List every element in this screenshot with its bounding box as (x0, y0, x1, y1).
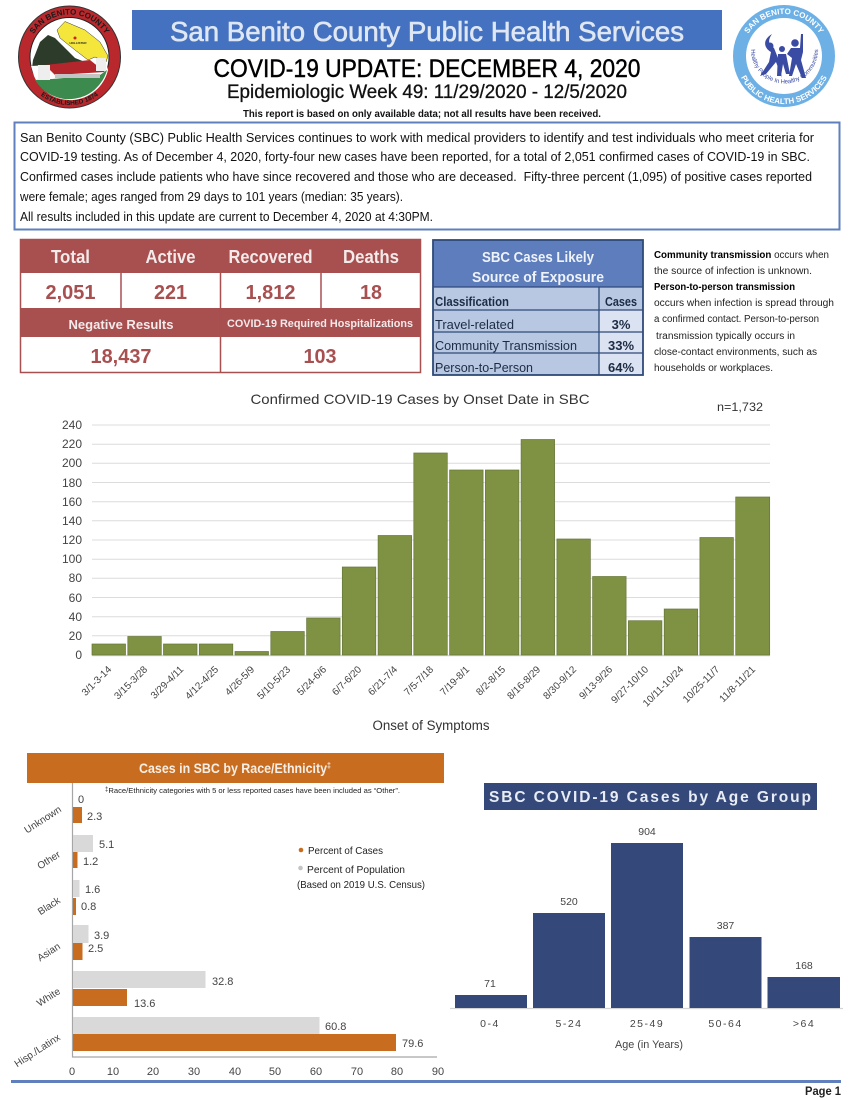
bar chart: race/ethnicity: Unknown (23, 804, 64, 836)
title banner (132, 10, 722, 50)
bar chart: cases by onset date: 3/15-3/28 (112, 664, 150, 702)
bar chart: race/ethnicity: 0 (78, 794, 84, 806)
bar chart: race/ethnicity: 50 (269, 1066, 281, 1078)
bar chart: cases by onset date: 40 (69, 610, 82, 624)
logo: San Benito County seal: ESTABLISHED 1874 (41, 92, 98, 105)
panel: summary text: San Benito County (SBC) Public Health Services continues to work with medical providers to identify and test individuals who meet criteria for (20, 131, 814, 145)
bar chart: cases by onset date: 6/7-6/20 (330, 664, 364, 698)
age group heading (484, 783, 817, 810)
page number: Page 1 (805, 1084, 841, 1098)
bar chart: cases by onset date: 3/1-3-14 (80, 664, 114, 698)
bar chart: race/ethnicity: 32.8 (212, 976, 233, 988)
legend: race/ethnicity: (Based on 2019 U.S. Census) (297, 879, 425, 891)
bar chart: race/ethnicity: 0 (69, 1066, 75, 1078)
legend: race/ethnicity: Percent of Cases (308, 845, 383, 857)
bar chart: cases by onset date (62, 418, 770, 733)
bar chart: race/ethnicity: Asian (36, 941, 63, 964)
race/ethnicity heading: ‡ (327, 761, 331, 770)
chart title: cases by onset date: Confirmed COVID-19 Cases by Onset Date in SBC (250, 391, 590, 407)
panel: case totals table: Active (146, 247, 196, 267)
panel: summary text: were female; ages ranged from 29 days to 101 years (median: 35 years). (19, 190, 403, 204)
bar chart: race/ethnicity: 13.6 (134, 998, 155, 1010)
bar chart: cases by onset date: 8/30-9/12 (541, 664, 579, 702)
panel: source of exposure table: Community Transmission (435, 338, 577, 353)
bar chart: race/ethnicity: 80 (391, 1066, 403, 1078)
logo: Public Health Services (733, 5, 835, 107)
bar chart: cases by onset date: 100 (62, 552, 82, 566)
bar chart: age group: 0-4 (480, 1018, 500, 1030)
panel: source of exposure table: 3% (612, 317, 631, 332)
panel: case totals table: Deaths (343, 247, 399, 267)
footer rule (11, 1080, 841, 1083)
panel: case totals table: 1,812 (246, 282, 296, 304)
logo: Public Health Services: SAN BENITO COUNTY (744, 8, 824, 33)
bar chart: race/ethnicity: 10 (107, 1066, 119, 1078)
bar chart: cases by onset date: 5/10-5/23 (255, 664, 293, 702)
bar chart: race/ethnicity: 20 (147, 1066, 159, 1078)
bar chart: race/ethnicity: 60.8 (325, 1021, 346, 1033)
bar chart: race/ethnicity: 79.6 (402, 1038, 423, 1050)
panel: source of exposure table: 33% (608, 338, 634, 353)
title banner: San Benito County Public Health Services (170, 16, 684, 47)
bar chart: age group: 25-49 (630, 1018, 664, 1030)
logo: San Benito County seal (18, 6, 121, 108)
bar chart: race/ethnicity: Black (36, 895, 63, 918)
panel: source of exposure table: Classification (435, 294, 509, 309)
panel: summary text: Confirmed cases include patients who have since recovered and those who are deceased. Fifty-three percent (1,095) of positive cases reported (20, 170, 812, 184)
bar chart: cases by onset date: 240 (62, 418, 82, 432)
bar chart: race/ethnicity: White (35, 986, 63, 1009)
bar chart: race/ethnicity: Hisp./Latinx (13, 1032, 63, 1070)
text block: transmission definitions: the source of infection is unknown. (654, 266, 812, 277)
bar chart: cases by onset date: 9/13-9/26 (577, 664, 615, 702)
bar chart: race/ethnicity: Other (36, 849, 63, 872)
bar chart: cases by onset date: 20 (69, 629, 82, 643)
bar chart: cases by onset date: 180 (62, 476, 82, 490)
panel: source of exposure table: Cases (605, 294, 637, 309)
bar chart: race/ethnicity: 2.5 (88, 943, 103, 955)
bar chart: age group: 50-64 (708, 1018, 743, 1030)
bar chart: cases by onset date: 8/16-8/29 (505, 664, 543, 702)
bar chart: cases by onset date: 200 (62, 456, 82, 470)
bar chart: cases by onset date: 10/25-11/7 (681, 664, 722, 705)
panel: case totals table: Total (51, 247, 90, 267)
text block: transmission definitions (654, 250, 834, 374)
panel: case totals table (20, 239, 421, 373)
panel: case totals table: COVID-19 Required Hospitalizations (227, 318, 413, 330)
panel: case totals table: Negative Results (68, 317, 174, 332)
panel: source of exposure table (433, 240, 643, 375)
panel: case totals table: 2,051 (46, 282, 96, 304)
panel: case totals table: 18 (360, 282, 382, 304)
logo: Public Health Services: PUBLIC HEALTH SERVICES (741, 75, 826, 104)
panel: case totals table: 221 (154, 282, 187, 304)
bar chart: cases by onset date: 3/29-4/11 (149, 664, 186, 701)
race/ethnicity footnote: Race/Ethnicity categories with 5 or less reported cases have been included as “Other”. (108, 786, 400, 795)
text block: transmission definitions: occurs when infection is spread through (654, 298, 834, 309)
bar chart: age group: Age (in Years) (615, 1039, 683, 1051)
bar chart: race/ethnicity: 90 (432, 1066, 444, 1078)
bar chart: race/ethnicity: 40 (229, 1066, 241, 1078)
text block: transmission definitions: Person-to-person transmission (654, 282, 795, 293)
bar chart: cases by onset date: 7/19-8/1 (438, 664, 472, 698)
bar chart: race/ethnicity (13, 783, 444, 1078)
bar chart: cases by onset date: 5/24-6/6 (295, 664, 329, 698)
bar chart: age group: 387 (717, 920, 734, 932)
bar chart: race/ethnicity: 1.2 (83, 856, 98, 868)
bar chart: cases by onset date: 9/27-10/10 (610, 664, 651, 706)
heading: epidemiologic week: Epidemiologic Week 49: 11/29/2020 - 12/5/2020 (227, 82, 627, 103)
logo: San Benito County seal: SAN BENITO COUNTY (30, 8, 110, 34)
legend: race/ethnicity: Percent of Population (307, 864, 405, 876)
panel: source of exposure table: 64% (608, 360, 634, 375)
panel: case totals table: Recovered (228, 247, 312, 267)
bar chart: age group: 71 (484, 978, 496, 990)
bar chart: cases by onset date: 11/8-11/21 (718, 664, 758, 705)
text block: transmission definitions: close-contact environments, such as (654, 347, 817, 358)
text block: transmission definitions: transmission typically occurs in (656, 331, 795, 342)
bar chart: cases by onset date: 6/21-7/4 (366, 664, 400, 698)
bar chart: race/ethnicity: 3.9 (94, 930, 109, 942)
panel: summary text: All results included in this update are current to December 4, 2020 at 4:30PM. (20, 210, 433, 224)
bar chart: age group: 904 (638, 826, 656, 838)
bar chart: cases by onset date: 220 (62, 437, 82, 451)
bar chart: cases by onset date: 120 (62, 533, 82, 547)
heading: update date: COVID-19 UPDATE: DECEMBER 4, 2020 (214, 55, 640, 83)
text block: transmission definitions: Community transmission occurs when (654, 250, 829, 261)
panel: summary text (14, 122, 840, 230)
panel: source of exposure table: Travel-related (435, 317, 514, 332)
bar chart: cases by onset date: 60 (69, 591, 82, 605)
bar chart: age group: 5-24 (555, 1018, 583, 1030)
text block: transmission definitions: a confirmed contact. Person-to-person (654, 314, 819, 325)
bar chart: race/ethnicity: 0.8 (81, 901, 96, 913)
bar chart: cases by onset date: 0 (75, 648, 82, 662)
bar chart: age group: 168 (795, 960, 813, 972)
bar chart: race/ethnicity: 60 (310, 1066, 322, 1078)
legend: race/ethnicity (297, 845, 425, 891)
panel: source of exposure table: SBC Cases Likely (482, 250, 594, 266)
bar chart: cases by onset date: 4/26-5/9 (223, 664, 257, 698)
bar chart: cases by onset date: 7/5-7/18 (402, 664, 436, 698)
panel: source of exposure table: Person-to-Person (435, 360, 533, 375)
text block: transmission definitions: households or workplaces. (654, 363, 773, 374)
bar chart: race/ethnicity: 30 (188, 1066, 200, 1078)
panel: case totals table: 18,437 (90, 346, 152, 368)
sample size note: n=1,732 (717, 400, 763, 414)
bar chart: race/ethnicity: 70 (351, 1066, 363, 1078)
bar chart: race/ethnicity: 1.6 (85, 884, 100, 896)
bar chart: age group (450, 826, 843, 1051)
panel: summary text: COVID-19 testing. As of December 4, 2020, forty-four new cases have been reported, for a total of 2,051 confirmed cases of COVID-19 in SBC. (20, 150, 810, 164)
race/ethnicity footnote: ‡ (105, 787, 108, 793)
bar chart: cases by onset date: 80 (69, 571, 82, 585)
logo: San Benito County seal: HOLLISTER (70, 41, 87, 45)
bar chart: age group: 520 (560, 896, 578, 908)
panel: source of exposure table: Source of Exposure (472, 270, 604, 286)
bar chart: cases by onset date: 8/2-8/15 (474, 664, 508, 698)
race/ethnicity heading: Cases in SBC by Race/Ethnicity (139, 760, 351, 776)
report note: This report is based on only available data; not all results have been received. (243, 108, 601, 120)
logo: Public Health Services: Healthy People In Healthy Communities (751, 50, 818, 84)
bar chart: race/ethnicity: 2.3 (87, 811, 102, 823)
race/ethnicity heading (27, 753, 444, 783)
bar chart: cases by onset date: 4/12-4/25 (183, 664, 221, 702)
bar chart: cases by onset date: 160 (62, 495, 82, 509)
bar chart: cases by onset date: 10/11-10/24 (641, 664, 686, 709)
bar chart: race/ethnicity: 5.1 (99, 839, 114, 851)
age group heading: SBC COVID-19 Cases by Age Group (489, 789, 811, 806)
bar chart: cases by onset date: 140 (62, 514, 82, 528)
bar chart: cases by onset date: Onset of Symptoms (372, 718, 490, 733)
bar chart: age group: >64 (793, 1018, 815, 1030)
panel: case totals table: 103 (304, 346, 336, 368)
